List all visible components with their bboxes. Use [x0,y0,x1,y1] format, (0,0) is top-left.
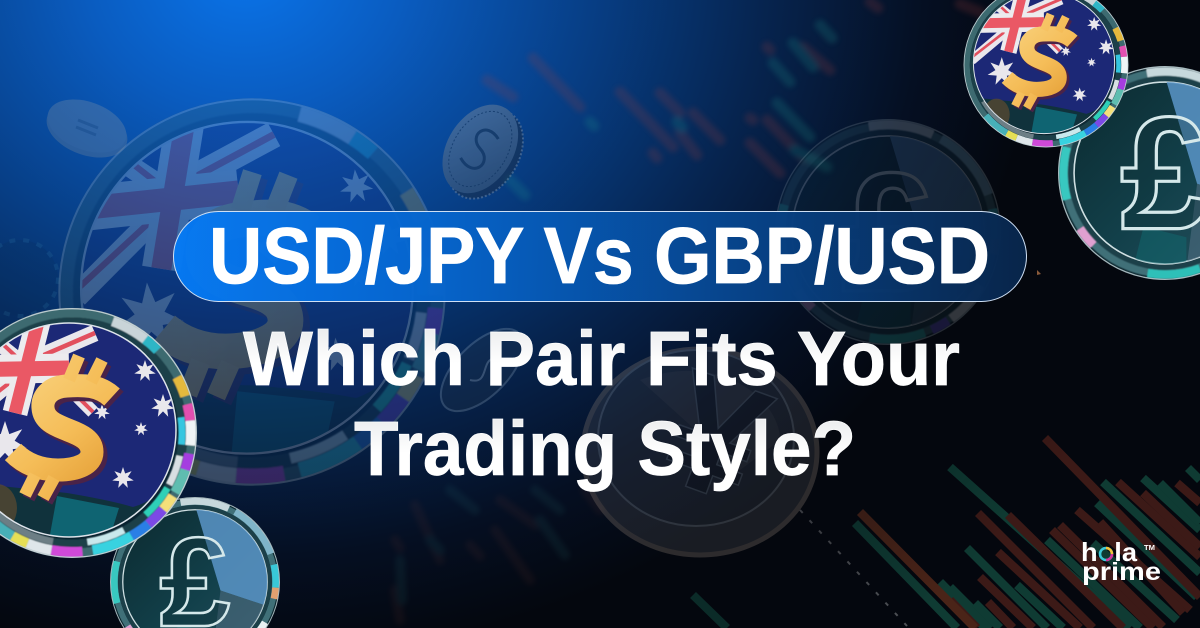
coin: pound bottom left [110,497,280,628]
ghost coin: Australian dollar [42,82,462,502]
ghost coin: small tilted coin centre [427,315,537,425]
heading line 2: Trading Style? [354,406,856,492]
coin: Australian dollar top right [964,0,1128,147]
candlestick chart bottom right [693,438,1200,628]
coin: Australian dollar left [0,308,197,558]
title pill: USD/JPY Vs GBP/USD [209,211,990,300]
faded chart: upper centre [487,2,980,195]
ghost coin: tilted dollar coin [426,91,540,213]
faded chart: lower centre [395,490,600,620]
ghost coin: small iridescent coin at left edge [0,240,58,316]
ghost coin: small flat coin [39,89,135,168]
heading line 1: Which Pair Fits Your [243,316,960,402]
logo: hola prime: TM [1144,545,1155,552]
ghost coin: pound [775,119,1001,345]
ghost coin: yen: ¥ [641,334,790,539]
logo: hola prime [1081,537,1161,586]
ghost coin: yen [583,334,817,555]
logo: hola prime: prime [1082,558,1161,586]
speck [1037,270,1041,275]
logo: hola prime: hola [1081,537,1138,567]
coin: pound top right [1058,66,1200,280]
